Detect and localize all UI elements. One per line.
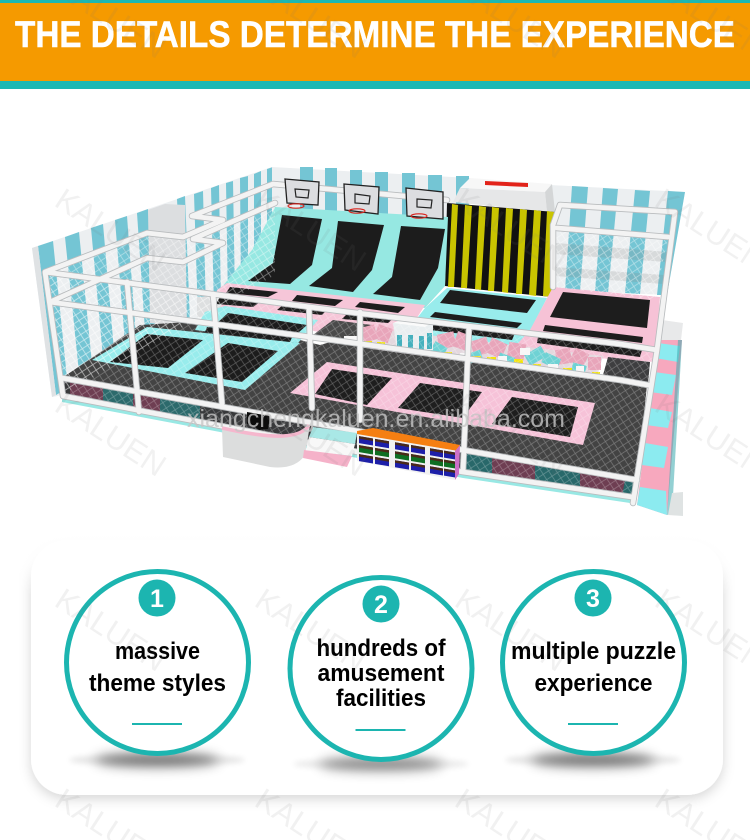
foam steps — [303, 427, 357, 467]
feature 3 — [502, 572, 684, 754]
right wall floor: teal section — [400, 288, 547, 350]
feature 2: 2 — [374, 591, 388, 619]
ramp 1 — [248, 215, 322, 284]
ramp 3 — [373, 226, 445, 300]
KALUEN watermarks: KALUEN — [449, 582, 572, 678]
KALUEN watermarks: KALUEN — [49, 387, 172, 483]
reception desk — [222, 412, 310, 468]
basketball hoop 1 — [285, 179, 319, 208]
net over front — [45, 272, 657, 500]
feature 3: experience — [534, 670, 652, 697]
pink lower platform — [290, 362, 595, 445]
lower black trampolines — [315, 369, 578, 437]
foam pit — [344, 324, 603, 380]
left small box — [197, 295, 225, 317]
site address watermark: xiangchengkaluen.en.alibaba.com — [187, 405, 565, 433]
illustration: trampoline park — [32, 167, 685, 516]
feature 1: massive — [115, 638, 200, 665]
feature 2: hundreds of — [316, 635, 446, 662]
right wall floor: pink section — [510, 287, 660, 362]
dark floor — [62, 320, 647, 482]
header banner — [0, 0, 750, 89]
shoe cubby — [357, 428, 460, 480]
left black trampolines — [110, 313, 307, 382]
left striped wall — [32, 167, 273, 397]
KALUEN watermarks: KALUEN — [449, 182, 572, 278]
small striped booth — [393, 319, 433, 350]
central dark panel — [313, 320, 372, 345]
feature 2: facilities — [336, 685, 426, 712]
right pink and teal strip — [637, 320, 683, 516]
left teal platform — [92, 327, 300, 390]
lower front pads — [62, 380, 637, 503]
right dark panel — [603, 357, 650, 384]
teal ramp base — [222, 207, 448, 308]
feature 3: multiple puzzle — [511, 638, 676, 665]
ramp 2 — [309, 221, 384, 292]
pink floor section — [215, 283, 425, 345]
feature 1: theme styles — [89, 670, 226, 697]
KALUEN watermarks: KALUEN — [249, 387, 372, 483]
feature 1 — [66, 572, 248, 754]
right striped wall — [550, 185, 685, 295]
yellow and black climbing wall — [445, 203, 555, 297]
basketball hoop 3 — [406, 188, 443, 219]
KALUEN watermarks: KALUEN — [49, 182, 172, 278]
top box with red sign — [453, 178, 555, 212]
white column — [148, 204, 187, 327]
feature 2: amusement — [318, 660, 444, 687]
KALUEN watermarks: KALUEN — [449, 387, 572, 483]
back striped wall — [272, 167, 470, 240]
small black trampolines — [216, 287, 650, 357]
feature 3: 3 — [586, 585, 600, 613]
KALUEN watermarks: KALUEN — [49, 582, 172, 678]
net over right wall — [553, 228, 668, 300]
feature 1: 1 — [150, 585, 164, 613]
KALUEN watermarks: KALUEN — [249, 182, 372, 278]
KALUEN watermarks: KALUEN — [249, 582, 372, 678]
panel: feature card — [20, 525, 734, 795]
feature 2 — [290, 578, 472, 760]
circle shadows — [69, 753, 681, 771]
basketball hoop 2 — [344, 184, 379, 214]
net over left wall — [45, 203, 275, 395]
white rails — [45, 184, 675, 503]
